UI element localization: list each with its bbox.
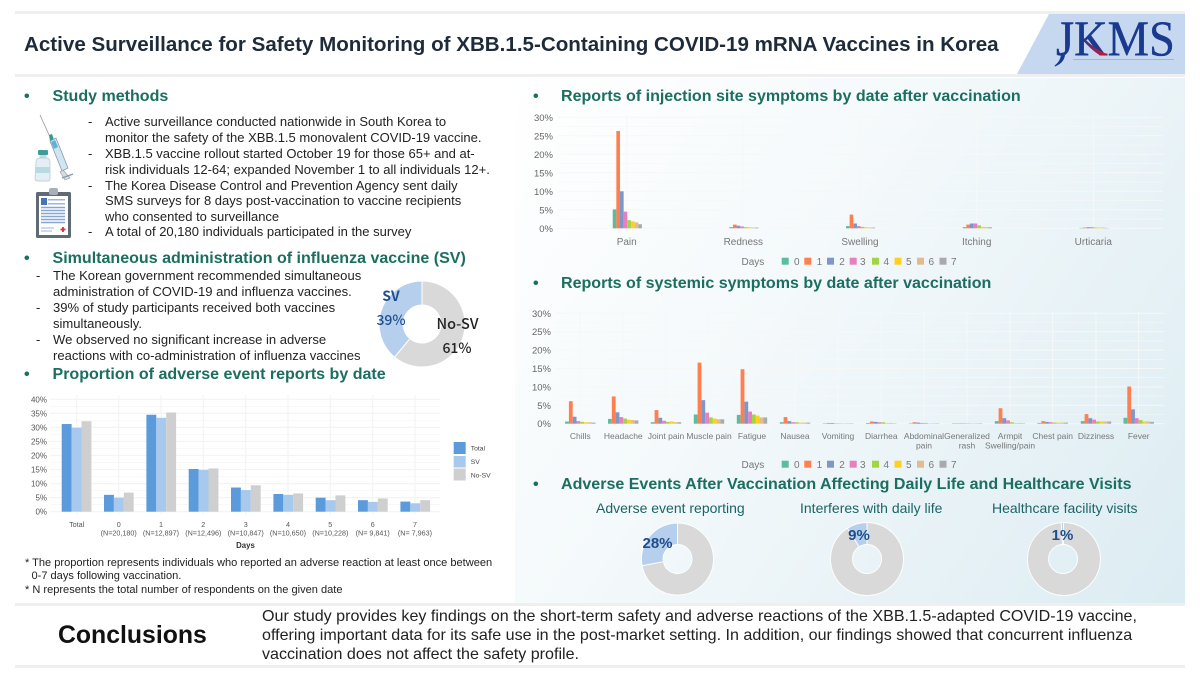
bar chart: systemic symptoms: Vomiting [822, 431, 855, 441]
header band [15, 11, 1185, 77]
bar chart: adverse event reports by date: 25% [31, 438, 47, 446]
text block: simultaneous administration list [36, 268, 361, 363]
legend: days: 5 [906, 460, 912, 471]
bar chart: systemic symptoms: rash [959, 440, 976, 450]
bar chart: injection site symptoms: Redness [724, 237, 763, 248]
text block: chart footnotes: * N represents the total number of respondents on the given date [25, 584, 342, 596]
bar chart: systemic symptoms: Dizziness [1078, 431, 1114, 441]
text block: study methods list: who consented to surveillance [105, 209, 279, 224]
legend: days: Days [742, 460, 764, 471]
donut chart: SV share: SV [382, 286, 400, 306]
bar chart: adverse event reports by date: (N=12,897) [143, 528, 179, 538]
bar chart: injection site symptoms: 25% [534, 132, 554, 142]
text block: study methods list: monitor the safety of the XBB.1.5 monovalent COVID-19 vaccine. [105, 130, 481, 145]
bar chart: adverse event reports by date: Total [471, 446, 486, 452]
bar chart: adverse event reports by date: 6 [371, 520, 375, 529]
text block: simultaneous administration list: - [36, 332, 40, 347]
donut chart: SV share [376, 282, 479, 366]
heading: study methods: • [24, 87, 30, 105]
text block: chart footnotes: 0-7 days following vaccination. [32, 570, 181, 582]
title: Active Surveillance for Safety Monitoring of XBB.1.5-Containing COVID-19 mRNA Vaccines in Korea [24, 33, 999, 56]
donut chart: healthcare facility visits 1%: 1% [1052, 527, 1073, 544]
bar chart: adverse event reports by date: 5 [328, 520, 332, 529]
donut chart: interferes with daily life 9% [830, 522, 904, 596]
text block: chart footnotes: * The proportion represents individuals who reported an adverse reaction at least once between [25, 556, 492, 568]
heading: injection site symptoms: • [533, 87, 539, 105]
donut chart: SV share: 61% [442, 338, 472, 358]
bar chart: systemic symptoms: 10% [532, 382, 552, 393]
bar chart: systemic symptoms: pain [916, 440, 932, 450]
text block: study methods list: risk individuals 12-64; expanded November 1 to all individuals 12+. [105, 162, 490, 177]
legend: days: 2 [839, 257, 845, 268]
heading: simultaneous administration: • [24, 249, 30, 267]
text block: study methods list: - [88, 146, 92, 161]
text block: simultaneous administration list: administration of COVID-19 and influenza vaccines. [53, 284, 352, 299]
bar chart: injection site symptoms: 20% [534, 150, 554, 161]
legend: days: 0 [794, 257, 800, 268]
legend: days: 4 [884, 460, 890, 471]
legend: days: 3 [860, 257, 866, 268]
bar chart: systemic symptoms: Fatigue [738, 431, 766, 441]
bar chart: injection site symptoms: 0% [539, 224, 554, 235]
bar chart: injection site symptoms: 15% [534, 168, 554, 180]
heading: conclusions: Conclusions [58, 622, 207, 649]
bar chart: systemic symptoms: Chest pain [1032, 431, 1073, 441]
bar chart: systemic symptoms: Chills [570, 431, 591, 441]
bar chart: adverse event reports by date: 35% [31, 409, 47, 418]
bar chart: systemic symptoms [532, 309, 1164, 471]
bar chart: injection site symptoms: Urticaria [1075, 237, 1112, 248]
heading: systemic symptoms: Reports of systemic symptoms by date after vaccination [561, 274, 991, 292]
bar chart: systemic symptoms: Generalized [944, 431, 990, 441]
donut chart: SV share: No-SV [437, 313, 479, 334]
legend: days [742, 460, 957, 471]
text block: simultaneous administration list: We observed no significant increase in adverse [53, 332, 326, 347]
bar chart: injection site symptoms: 5% [539, 206, 554, 216]
bar chart: adverse event reports by date: 0 [117, 520, 121, 529]
bar chart: adverse event reports by date: 40% [31, 395, 47, 404]
bar chart: adverse event reports by date: (N=10,650) [270, 528, 306, 538]
donut chart: adverse event reporting 28% [641, 522, 714, 596]
text block: study methods list: - [88, 224, 92, 239]
bar chart: systemic symptoms: 30% [532, 309, 552, 320]
bar chart: systemic symptoms: Joint pain [648, 431, 684, 441]
legend: days [742, 257, 957, 268]
bar chart: systemic symptoms: Fever [1128, 431, 1150, 441]
legend: days: 7 [951, 460, 957, 471]
bar chart: systemic symptoms: Swelling/pain [985, 440, 1035, 450]
bar chart: adverse event reports by date: (N=10,847) [228, 528, 264, 538]
text block: simultaneous administration list: reactions with co-administration of influenza vaccines [53, 348, 360, 363]
bar chart: systemic symptoms: 20% [532, 346, 552, 357]
bar chart: adverse event reports by date: (N=10,228) [312, 528, 348, 538]
heading: proportion of adverse event reports: Proportion of adverse event reports by date [52, 365, 386, 383]
legend: days: Days [742, 257, 764, 268]
text block: simultaneous administration list: - [36, 300, 40, 315]
bar chart: adverse event reports by date: (N= 7,963) [398, 528, 432, 538]
bar chart: adverse event reports by date: 2 [201, 520, 205, 529]
text block: chart footnotes [25, 556, 492, 596]
text block: study methods list [88, 114, 490, 239]
bar chart: injection site symptoms: 30% [534, 113, 554, 124]
text block: simultaneous administration list: - [36, 268, 40, 283]
text block: conclusions: Our study provides key findings on the short-term safety and adverse reactions of the XBB.1.5-adapted COVID-19 vaccine, [262, 607, 1137, 625]
bar chart: adverse event reports by date: Days [236, 541, 255, 550]
text block: study methods list: SMS surveys for 8 days post-vaccination to vaccine recipients [105, 193, 461, 208]
bar chart: adverse event reports by date: 4 [286, 520, 290, 529]
legend: days: 7 [951, 257, 957, 268]
bar chart: systemic symptoms: Diarrhea [865, 431, 898, 441]
bar chart: injection site symptoms: Itching [962, 237, 991, 248]
bar chart: systemic symptoms: Muscle pain [686, 431, 732, 441]
heading: adverse events affecting daily life: • [533, 475, 539, 493]
icon: syringe and vial [34, 114, 74, 182]
heading: adverse events affecting daily life: Adverse Events After Vaccination Affecting Daily Life and Healthcare Visits [561, 475, 1132, 493]
bar chart: adverse event reports by date: 30% [31, 423, 47, 432]
donut chart: SV share: 39% [376, 310, 406, 330]
text block: simultaneous administration list: 39% of study participants received both vaccines [53, 300, 335, 315]
legend: days: 2 [839, 460, 845, 471]
bar chart: systemic symptoms: 0% [537, 419, 552, 430]
heading: study methods: Study methods [52, 87, 168, 105]
bar chart: adverse event reports by date: No-SV [471, 472, 491, 480]
bar chart: systemic symptoms: Headache [604, 431, 643, 441]
bar chart: systemic symptoms: Armpit [998, 431, 1023, 441]
bar chart: adverse event reports by date: (N=12,496) [185, 528, 221, 538]
text block: study methods list: Active surveillance conducted nationwide in South Korea to [105, 114, 446, 129]
text block: simultaneous administration list: simultaneously. [53, 316, 142, 331]
bar chart: adverse event reports by date: 0% [35, 508, 47, 517]
subheading: adverse event reporting: Adverse event reporting [596, 500, 745, 516]
legend: days: 1 [817, 257, 823, 268]
text block: conclusions: vaccination does not affect the safety profile. [262, 645, 579, 663]
text block: study methods list: XBB.1.5 vaccine rollout started October 19 for those 65+ and at- [105, 146, 475, 161]
bar chart: adverse event reports by date: 5% [35, 494, 47, 503]
legend: days: 1 [817, 460, 823, 471]
text block: study methods list: A total of 20,180 individuals participated in the survey [105, 224, 411, 239]
icon: clipboard [36, 188, 71, 238]
donut chart: interferes with daily life 9%: 9% [848, 527, 870, 544]
legend: days: 4 [884, 257, 890, 268]
bar chart: adverse event reports by date: 15% [31, 466, 47, 474]
bar chart: adverse event reports by date: Total [69, 520, 85, 529]
bar chart: injection site symptoms: Pain [617, 237, 637, 248]
bar chart: injection site symptoms: Swelling [841, 237, 879, 248]
bar chart: injection site symptoms: 10% [534, 187, 554, 198]
donut chart: adverse event reporting 28%: 28% [642, 535, 673, 552]
text block: study methods list: - [88, 178, 92, 192]
bar chart: adverse event reports by date: (N=20,180) [101, 528, 137, 538]
bar chart: injection site symptoms [534, 113, 1163, 268]
legend: days: 3 [860, 460, 866, 471]
legend: days: 6 [928, 460, 934, 471]
logo: JKMS [1017, 14, 1185, 74]
bar chart: adverse event reports by date: 20% [31, 452, 47, 460]
bar chart: systemic symptoms: 15% [532, 364, 552, 375]
bar chart: adverse event reports by date [31, 395, 491, 550]
text block: study methods list: The Korea Disease Control and Prevention Agency sent daily [105, 178, 458, 192]
bar chart: systemic symptoms: 5% [537, 401, 552, 412]
text block: study methods list: - [88, 114, 92, 129]
bar chart: adverse event reports by date: 3 [244, 520, 248, 529]
donut chart: healthcare facility visits 1% [1027, 522, 1101, 596]
bar chart: systemic symptoms: Nausea [780, 431, 810, 441]
text block: conclusions: offering important data for its safe use in the post-market setting. In addition, our findings showed that concurrent influenza [262, 626, 1132, 644]
legend: days: 6 [928, 257, 934, 268]
subheading: interferes with daily life: Interferes with daily life [800, 500, 942, 516]
heading: systemic symptoms: • [533, 274, 539, 292]
bar chart: adverse event reports by date: SV [471, 459, 480, 466]
text block: simultaneous administration list: The Korean government recommended simultaneous [53, 268, 361, 283]
bar chart: systemic symptoms: 25% [532, 327, 552, 338]
bar chart: adverse event reports by date: 1 [159, 520, 163, 529]
bar chart: adverse event reports by date: 7 [413, 520, 417, 529]
heading: simultaneous administration: Simultaneous administration of influenza vaccine (SV) [52, 249, 466, 267]
legend: days: 5 [906, 257, 912, 268]
bar chart: adverse event reports by date: (N= 9,841) [356, 528, 390, 538]
text block: conclusions [262, 607, 1137, 663]
background panel: right column gradient [515, 78, 1185, 603]
conclusions band [15, 603, 1185, 668]
heading: proportion of adverse event reports: • [24, 365, 30, 383]
subheading: healthcare facility visits: Healthcare facility visits [992, 500, 1138, 516]
heading: injection site symptoms: Reports of injection site symptoms by date after vaccination [561, 87, 1021, 105]
bar chart: systemic symptoms: Abdominal [904, 431, 944, 441]
legend: days: 0 [794, 460, 800, 471]
bar chart: adverse event reports by date: 10% [31, 480, 47, 489]
